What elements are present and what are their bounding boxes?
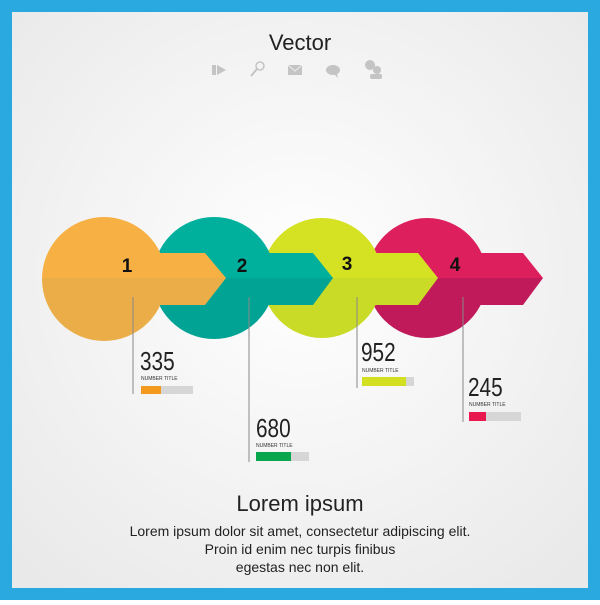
circle 1	[42, 217, 166, 341]
stat 3: 952	[361, 338, 396, 367]
icon: search	[251, 62, 264, 76]
stat 4: 245	[468, 373, 503, 402]
diagram: circles and arrows	[42, 217, 543, 341]
body text: egestas nec non elit.	[236, 559, 364, 575]
stat 3: NUMBER TITLE	[362, 368, 399, 374]
circle 4	[367, 218, 487, 338]
stat 3	[357, 297, 414, 388]
stat 2: 680	[256, 414, 291, 443]
icon: mail	[288, 65, 302, 75]
heading: Lorem ipsum: Lorem ipsum	[236, 491, 364, 516]
body text: Lorem ipsum dolor sit amet, consectetur adipiscing elit.	[130, 523, 470, 539]
circle 3	[262, 218, 382, 338]
stat 4: NUMBER TITLE	[469, 402, 506, 408]
circle 2	[153, 217, 275, 339]
arrow 4	[427, 253, 543, 305]
stat 1: NUMBER TITLE	[141, 376, 178, 382]
icon: chat	[326, 65, 340, 78]
step numbers	[122, 254, 461, 277]
stat 1: 335	[140, 347, 175, 376]
arrow 3	[322, 253, 438, 305]
arrow 1	[104, 253, 226, 305]
body text: Proin id enim nec turpis finibus	[205, 541, 395, 557]
step numbers: 1	[122, 256, 133, 277]
stat 2	[249, 297, 309, 462]
arrow 2	[214, 253, 333, 305]
title: Vector	[269, 30, 331, 55]
body text	[130, 523, 470, 575]
stat 4	[463, 297, 521, 422]
stat 2: NUMBER TITLE	[256, 443, 293, 449]
step numbers: 2	[237, 256, 247, 277]
icon row	[212, 60, 382, 79]
icon: user cloud	[365, 60, 382, 79]
step numbers: 4	[450, 255, 461, 276]
stat 1	[133, 297, 193, 394]
step numbers: 3	[342, 254, 352, 275]
icon: play	[212, 65, 226, 75]
